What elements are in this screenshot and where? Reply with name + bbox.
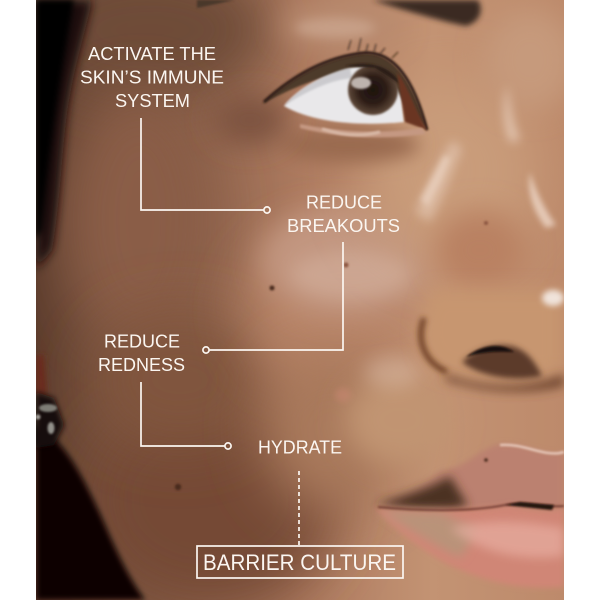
moles <box>175 221 488 490</box>
eye <box>262 38 427 137</box>
skin highlights <box>291 18 556 388</box>
dashed connector: hydrate to barrier culture <box>298 471 300 546</box>
label: reduce redness: REDNESS <box>98 354 185 375</box>
earring <box>36 392 64 448</box>
label: activate the skin's immune system: ACTIVATE THE <box>88 43 216 64</box>
label: reduce breakouts: BREAKOUTS <box>287 215 400 236</box>
ear shadow and neck <box>36 355 145 600</box>
label: reduce redness: REDUCE <box>104 330 180 352</box>
label: reduce breakouts: REDUCE <box>306 192 382 212</box>
label: reduce redness <box>98 330 185 375</box>
label: activate the skin's immune system <box>80 43 224 111</box>
lips <box>375 444 564 588</box>
eyebrow <box>197 0 481 26</box>
badge: barrier culture: BARRIER CULTURE <box>203 550 396 575</box>
connector: immune system to reduce breakouts <box>141 118 270 213</box>
connector: redness to hydrate <box>141 382 231 449</box>
label: hydrate: HYDRATE <box>258 436 342 458</box>
nose <box>421 290 564 392</box>
label: activate the skin's immune system: SYSTEM <box>115 90 190 111</box>
label: reduce breakouts <box>287 192 400 236</box>
connector: breakouts to reduce redness <box>203 242 343 353</box>
label: activate the skin's immune system: SKIN’S IMMUNE <box>80 66 224 88</box>
hair <box>36 0 92 270</box>
